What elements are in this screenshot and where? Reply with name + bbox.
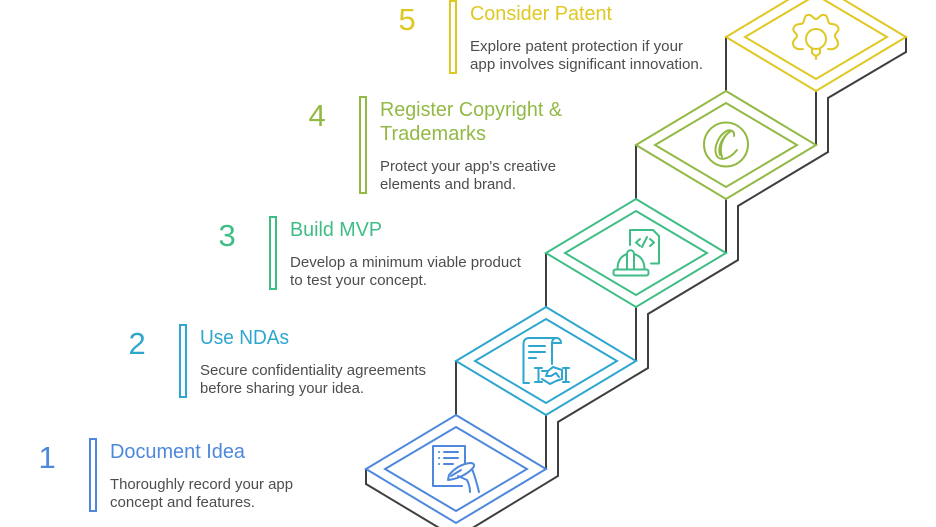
step 3 text: build MVP: 3 [218, 218, 236, 253]
step 4 text: register copyright and trademarks: Protect your app's creative [380, 158, 556, 175]
step 2 text: use NDAs: 2 [128, 326, 146, 361]
step 5 text: consider patent: Explore patent protection if your [470, 38, 683, 55]
step 4: copyright platform [636, 91, 816, 199]
step 4 text: register copyright and trademarks: Trademarks [380, 122, 486, 145]
step 3 text: build MVP: to test your concept. [290, 272, 427, 289]
step 1 text: document idea [38, 439, 293, 511]
step 5 text: consider patent: 5 [398, 2, 416, 37]
step 5 text: consider patent [398, 1, 703, 73]
step 2: use NDAs platform [456, 307, 636, 415]
step 1 text: document idea: Thoroughly record your app [110, 476, 293, 493]
step 5 text: consider patent: app involves significant innovation. [470, 56, 703, 73]
icon: scroll and handshake [524, 338, 569, 384]
step 1 text: document idea: concept and features. [110, 494, 255, 511]
step 4 text: register copyright and trademarks: elements and brand. [380, 176, 516, 193]
step 2 text: use NDAs: Use NDAs [200, 326, 289, 349]
step 4 text: register copyright and trademarks [308, 97, 562, 193]
step 3: build MVP platform [546, 199, 726, 307]
step 3 text: build MVP [218, 217, 522, 289]
icon: gear with light bulb [793, 15, 839, 59]
step 2 text: use NDAs: Secure confidentiality agreements [200, 362, 426, 379]
step 5 text: consider patent: Consider Patent [470, 2, 612, 25]
icon: copyright circle [704, 122, 748, 166]
step 4 text: register copyright and trademarks: 4 [308, 98, 326, 133]
staircase outline [366, 37, 906, 527]
step 1 text: document idea: Document Idea [110, 440, 246, 463]
step 2 text: use NDAs [128, 325, 426, 397]
step 2 text: use NDAs: before sharing your idea. [200, 380, 364, 397]
icon: code file and hard hat [614, 230, 659, 276]
step 1: document idea platform [366, 415, 546, 523]
step 4 text: register copyright and trademarks: Register Copyright & [380, 98, 562, 121]
step 5: patent platform [726, 0, 906, 91]
icon: document and pen [433, 446, 479, 492]
step 3 text: build MVP: Build MVP [290, 218, 382, 241]
step 1 text: document idea: 1 [38, 440, 56, 475]
step 3 text: build MVP: Develop a minimum viable product [290, 254, 522, 271]
